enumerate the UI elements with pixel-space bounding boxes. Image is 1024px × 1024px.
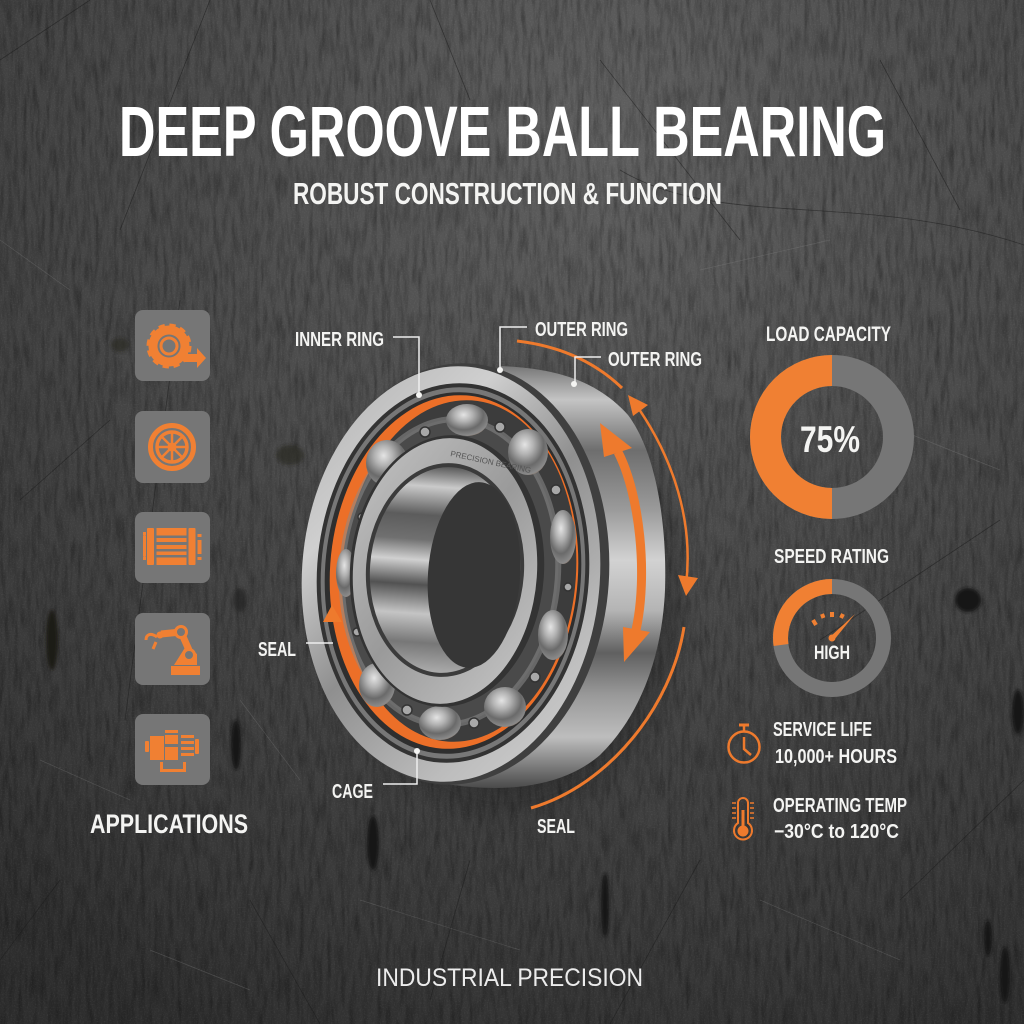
label: outer ring: OUTER RING	[535, 319, 628, 341]
rivets	[353, 422, 572, 728]
small seal arrow	[323, 605, 342, 622]
cage cavity	[332, 392, 588, 750]
text: temperature range: −30°C to 120°C	[774, 821, 899, 843]
subtitle: ROBUST CONSTRUCTION & FUNCTION	[293, 176, 722, 211]
cage ring	[332, 412, 568, 732]
icon: stopwatch	[728, 725, 760, 762]
thin arc bottom	[531, 627, 684, 808]
text: operating temp: OPERATING TEMP	[773, 795, 907, 817]
panel: load capacity	[766, 323, 898, 504]
value: high: HIGH	[814, 643, 850, 664]
text: service life: SERVICE LIFE	[773, 719, 872, 741]
gauge needle and ticks	[813, 612, 855, 642]
panel: speed rating	[774, 546, 889, 690]
text: hours: 10,000+ HOURS	[775, 746, 897, 768]
direction arrows	[323, 341, 698, 808]
drop shadow	[335, 378, 675, 802]
label: cage: CAGE	[332, 781, 373, 803]
label: outer ring second: OUTER RING	[608, 349, 702, 371]
heading: applications: APPLICATIONS	[90, 809, 248, 839]
label: seal bottom: SEAL	[537, 816, 575, 838]
thin arc right	[634, 402, 688, 585]
label: inner ring: INNER RING	[295, 329, 384, 351]
steel balls	[336, 404, 576, 740]
outer ring cylinder	[440, 366, 665, 788]
etched ring marking: PRECISION BEARING	[450, 449, 532, 475]
outer ring front face	[289, 353, 623, 795]
seal grooves	[304, 374, 602, 772]
thin arc top	[517, 341, 622, 388]
icon: electric motor	[135, 512, 210, 583]
footer tagline: INDUSTRIAL PRECISION	[376, 964, 643, 992]
callout lines	[306, 327, 601, 784]
bore opening	[422, 479, 526, 671]
panel: operating temp	[732, 795, 907, 843]
label: seal left: SEAL	[258, 639, 296, 661]
bore surface	[363, 462, 527, 678]
panel: applications icons	[135, 310, 210, 785]
thick double arrow	[618, 452, 642, 630]
gauge ring	[780, 586, 884, 690]
inner ring	[341, 429, 553, 713]
orange seal ring	[318, 387, 590, 757]
icon: wheel	[135, 411, 210, 483]
icon: thermometer	[732, 798, 754, 839]
icon: gear with arrow	[135, 310, 210, 381]
bearing illustration	[288, 341, 698, 808]
icon: robot arm	[135, 613, 210, 685]
value: 75%: 75%	[800, 419, 860, 460]
heading: speed rating: SPEED RATING	[774, 546, 889, 568]
panel: service life	[728, 719, 897, 768]
donut chart: 75%	[766, 370, 898, 504]
icon: pump motor	[135, 714, 210, 785]
heading: load capacity: LOAD CAPACITY	[766, 323, 891, 346]
